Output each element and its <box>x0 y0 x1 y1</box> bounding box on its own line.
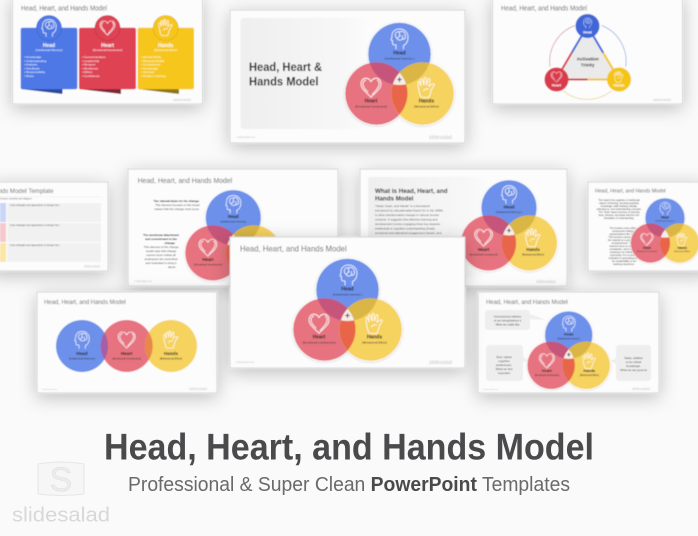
slide: activation trinity: slidesalad <box>653 97 671 102</box>
row: hands: Goal, strategies and approaches to change here. <box>10 244 60 247</box>
slide: three circles in a row: Head, Heart, and Hands Model <box>44 299 126 306</box>
side notes: foundation of understanding. <box>604 217 634 220</box>
main title: Head, Heart, and Hands Model <box>104 426 594 467</box>
slide: three circles in a row: 1 slidesalad.com <box>41 389 57 391</box>
card: heart: (Emotional Investment) <box>93 48 122 52</box>
cover text panel: Head, Heart & <box>249 60 322 74</box>
bubble: heart: What we find <box>496 367 513 371</box>
card: hands: • Problem Solving <box>141 74 166 78</box>
explanation panel: emotional and attitudinal engagement (heart), and <box>375 231 442 235</box>
emotional text <box>143 233 179 269</box>
venn diagram: Head <box>564 332 574 336</box>
venn diagram <box>344 22 454 126</box>
side notes: motivation in generations and <box>608 257 640 260</box>
overlapping row of circles: (Behavioral Effort) <box>160 356 182 360</box>
venn diagram: (Emotional Investment) <box>469 252 498 256</box>
venn diagram: (Intellectual memory ) <box>385 56 414 60</box>
venn diagram: Hands <box>419 98 434 104</box>
center triangle: Activation <box>577 56 599 62</box>
venn diagram: (Intellectual memory ) <box>557 337 580 340</box>
slide: three circles in a row: slidesalad <box>189 386 207 391</box>
venn diagram: (Behavioral Effort) <box>522 252 544 256</box>
explanation panel: "Head, Heart, and Hands" is a framework <box>375 204 430 208</box>
card: head: • Rules <box>24 74 34 78</box>
venn diagram: (Emotional Investment) <box>355 104 387 108</box>
slide: cover with Venn diagram: slidesalad <box>429 135 452 141</box>
venn diagram: (Emotional Investment) <box>194 262 222 266</box>
venn diagram: Heart <box>643 246 652 250</box>
card: head: (Intellectual Memory) <box>36 48 63 52</box>
bubble: heart: Soul, values <box>496 355 512 359</box>
card: hands: • Physical Health <box>141 59 165 63</box>
side notes: learning experience. <box>613 263 635 266</box>
venn diagram: Hands <box>677 246 687 250</box>
card: head: • Responsibility <box>24 70 45 74</box>
rational text <box>153 199 200 211</box>
explanation panel: development involve engaging three key aspects: <box>375 222 441 226</box>
venn diagram: (Behavioral Effort) <box>362 340 387 344</box>
side notes: The involves every effort to <box>610 227 639 230</box>
card: hands: (Behavioral Effort) <box>154 48 177 52</box>
slide: what is the model <box>360 169 567 286</box>
bubble: heart: preferences. <box>496 363 512 367</box>
cover text panel: Hands Model <box>249 74 318 88</box>
bubble: heart <box>486 345 528 381</box>
venn diagram: Hands <box>526 247 540 252</box>
overlapping row of circles: (Emotional Investment) <box>112 356 141 360</box>
node: heart: Heart <box>552 84 562 88</box>
side notes: This involves connecting with <box>609 236 640 239</box>
emotional text: and motivated to bring it <box>146 261 177 265</box>
slide: front center venn: slidesalad <box>429 360 452 366</box>
explanation panel: to drive transformative change in various human <box>375 213 439 217</box>
venn diagram: (Emotional Investment) <box>637 250 657 253</box>
venn diagram: Hands <box>367 334 382 340</box>
logo: slidesalad: slidesalad <box>12 504 110 527</box>
logo: slidesalad <box>12 461 110 527</box>
slide: venn with left text: Head, Heart, and Hands Model <box>138 176 232 185</box>
card: hands: • Mental Ability <box>141 55 162 59</box>
slide: venn with speech bubbles: slidesalad <box>632 386 650 391</box>
venn diagram: (Behavioral Effort) <box>674 250 690 253</box>
emotional text: cannot occur unless all <box>146 253 176 257</box>
overlapping row of circles: Head <box>76 351 88 356</box>
side notes: aspect of learning, focusing acquiring <box>599 202 639 205</box>
card: hands: • Knowledge <box>141 66 159 70</box>
venn diagram: + <box>567 352 571 359</box>
side notes: the sustainability of the <box>612 260 637 263</box>
venn diagram: Head <box>393 50 406 56</box>
bubble: head: What we really like <box>495 322 520 326</box>
side notes: the material on a personal and <box>608 239 641 242</box>
side notes: learners focus on empathy, <box>610 245 639 248</box>
bubble: head <box>485 310 546 330</box>
overlapping row of circles: Hands <box>164 351 178 356</box>
side notes: emotional level. "Heart" <box>612 242 637 245</box>
card: hands: • Competence <box>141 62 161 66</box>
venn diagram: + <box>397 74 402 84</box>
card: heart: • Resilience <box>82 66 98 70</box>
slides collage <box>0 0 698 393</box>
venn diagram: Head <box>661 215 669 219</box>
center triangle: Trinity <box>581 62 595 68</box>
venn diagram: + <box>507 226 512 235</box>
slide: front center venn: 1 slidesalad.com <box>235 360 254 364</box>
card: head: • Understanding <box>24 59 46 63</box>
card: hands: Hands <box>158 43 174 49</box>
bubble: head: Unconscious traits/us <box>494 314 522 318</box>
side notes: components relating to <box>612 230 637 233</box>
explanation panel: intellectual or cognitive understanding (head), <box>375 226 436 230</box>
row: heart: Goal, strategies and approaches to change here. <box>10 224 60 227</box>
card: heart: • Communication <box>82 55 106 59</box>
venn diagram: (Intellectual memory ) <box>333 292 362 296</box>
venn diagram <box>292 258 402 362</box>
overlapping row of circles: (Intellectual Memory) <box>69 356 95 360</box>
side notes: The head is the cognitive or intellectual <box>598 199 640 202</box>
venn diagram: Heart <box>542 369 553 373</box>
side notes: meaning in an individual or <box>610 251 638 254</box>
slide: venn with left text <box>128 169 338 286</box>
overlapping row of circles: Heart <box>121 351 133 356</box>
slide: three colored cards: slidesalad <box>173 97 191 102</box>
slide: front center venn <box>230 237 465 368</box>
slide: activation trinity <box>492 0 682 104</box>
emotional text: model says that change <box>146 249 177 253</box>
card: hands: • Survival <box>141 70 154 74</box>
card: heart: • Leadership <box>82 59 100 63</box>
rational text: The rational basis for the change. <box>153 199 200 203</box>
venn diagram <box>527 311 611 390</box>
venn diagram: (Intellectual memory) <box>220 220 246 224</box>
venn diagram: (Intellectual Memory ) <box>496 210 522 214</box>
card: heart: • Ethics <box>82 70 93 74</box>
venn diagram <box>460 179 558 271</box>
bubble: heart: important <box>498 371 510 375</box>
venn diagram: Heart <box>478 247 490 252</box>
slide: cover with Venn diagram <box>230 10 465 143</box>
bubble: hands <box>611 345 651 381</box>
venn diagram <box>184 189 282 281</box>
emotional text: The emotional attachment <box>143 233 179 237</box>
explanation panel: contexts. It suggests that effective learning and <box>375 218 438 222</box>
slide: model template table <box>0 182 108 271</box>
slide: three circles in a row <box>37 292 217 393</box>
rational text: This element focuses on the broad <box>155 203 200 207</box>
slide: three colored cards: Head, Heart, and Hands Model <box>21 6 107 12</box>
side notes <box>596 199 642 266</box>
bubble: heart: cognitive <box>498 359 510 363</box>
venn diagram: (Intellectual memory ) <box>656 219 675 222</box>
card: head: • Analysis <box>24 62 38 66</box>
venn diagram: (Emotional involvement) <box>302 340 336 344</box>
slide: activation trinity: Head, Heart, and Hands Model <box>501 6 587 12</box>
venn diagram: Heart <box>365 98 378 104</box>
slide: venn with centered notes, right edge <box>588 182 698 271</box>
venn diagram: Head <box>228 214 239 219</box>
slide: model template table: Answer checklist and diagram <box>0 198 32 200</box>
emotional text: employees are committed <box>144 257 178 261</box>
slide: venn with speech bubbles: Head, Heart, and Hands Model <box>486 299 568 306</box>
venn diagram: Head <box>504 204 515 209</box>
overlapping row of circles <box>56 320 197 372</box>
side notes: knowledge, skills thinking critically, <box>601 205 638 208</box>
center triangle <box>556 26 619 80</box>
slide: model template table: slidesalad <box>84 264 100 268</box>
explanation panel: What is Head, Heart, and <box>375 188 448 195</box>
venn diagram: (Behavioral Effort) <box>580 374 599 377</box>
side notes: The "head" aspect focuses on learning <box>599 211 640 214</box>
slide: front center venn: Head, Heart, and Hands Model <box>240 244 347 254</box>
card: head: • Feedback <box>24 66 40 70</box>
side notes: representatives like "heart." <box>609 233 639 236</box>
card: head <box>21 16 77 94</box>
node: heart <box>544 68 568 92</box>
slide: what is the model: slidesalad <box>536 279 556 284</box>
bubble: hands: What we are good at <box>620 368 647 372</box>
bubble: head: of our being/believe it <box>494 318 521 322</box>
slide: cover with Venn diagram: 1 slidesalad.com <box>236 135 255 139</box>
venn diagram: Heart <box>202 257 214 262</box>
cover text panel <box>240 18 366 129</box>
node: hands: Hands <box>614 84 624 88</box>
venn diagram: Hands <box>584 369 595 373</box>
card: heart: Heart <box>101 43 114 49</box>
emotional text: This element of the change <box>144 245 179 249</box>
slide: venn with left text: 1 slidesalad.com <box>134 280 152 283</box>
slide: venn with speech bubbles: 1 slidesalad.com <box>482 389 498 391</box>
venn diagram: (Behavioral Effort) <box>414 104 439 108</box>
side notes: community. It is a common <box>610 254 639 257</box>
side notes: facts, theories, and ideas that form the <box>599 214 640 217</box>
side notes: reflecting on, and understanding concepts. <box>596 208 642 211</box>
cycle arcs <box>550 26 626 99</box>
explanation panel: introduced by educationalist David Orr in the 1990s <box>375 208 444 212</box>
node: head <box>576 14 600 38</box>
icon: S badge: S <box>50 461 72 499</box>
rational text: reason that the change must occur. <box>154 207 200 211</box>
explanation panel <box>368 177 488 277</box>
card: head: Head <box>43 43 55 49</box>
emotional text: change. <box>165 241 176 245</box>
slide: venn with speech bubbles <box>478 292 659 393</box>
card: heart <box>79 16 136 94</box>
venn diagram <box>630 198 698 263</box>
node: head: Head <box>583 30 592 34</box>
slide: venn with centered notes, right edge: Head, Heart, and Hands Model <box>595 188 666 194</box>
venn diagram: Heart <box>313 334 326 340</box>
venn diagram: Head <box>341 286 354 292</box>
explanation panel: Hands Model <box>375 196 414 202</box>
card: hands <box>138 16 194 94</box>
card: head: • Knowledge <box>24 55 42 59</box>
bubble: hands: to be critical <box>626 360 642 364</box>
emotional text: about. <box>168 265 176 269</box>
bubble: hands: Tasks, abilities <box>624 356 643 360</box>
venn diagram: (Emotional Investment) <box>535 374 559 377</box>
card: heart: • Respect <box>82 62 95 66</box>
subtitle: Professional & Super Clean PowerPoint Templates <box>128 474 570 496</box>
slide: three colored cards <box>12 0 202 104</box>
side notes: compassion, and a drive for <box>609 248 639 251</box>
emotional text: and commitment to the <box>145 237 177 241</box>
card: heart: • Confidence <box>82 74 100 78</box>
node: hands <box>607 68 631 92</box>
bubble: hands: knowledge. <box>626 364 641 368</box>
row: head: Goal, strategies and approaches to change here. <box>10 204 60 207</box>
venn diagram: + <box>345 310 350 320</box>
